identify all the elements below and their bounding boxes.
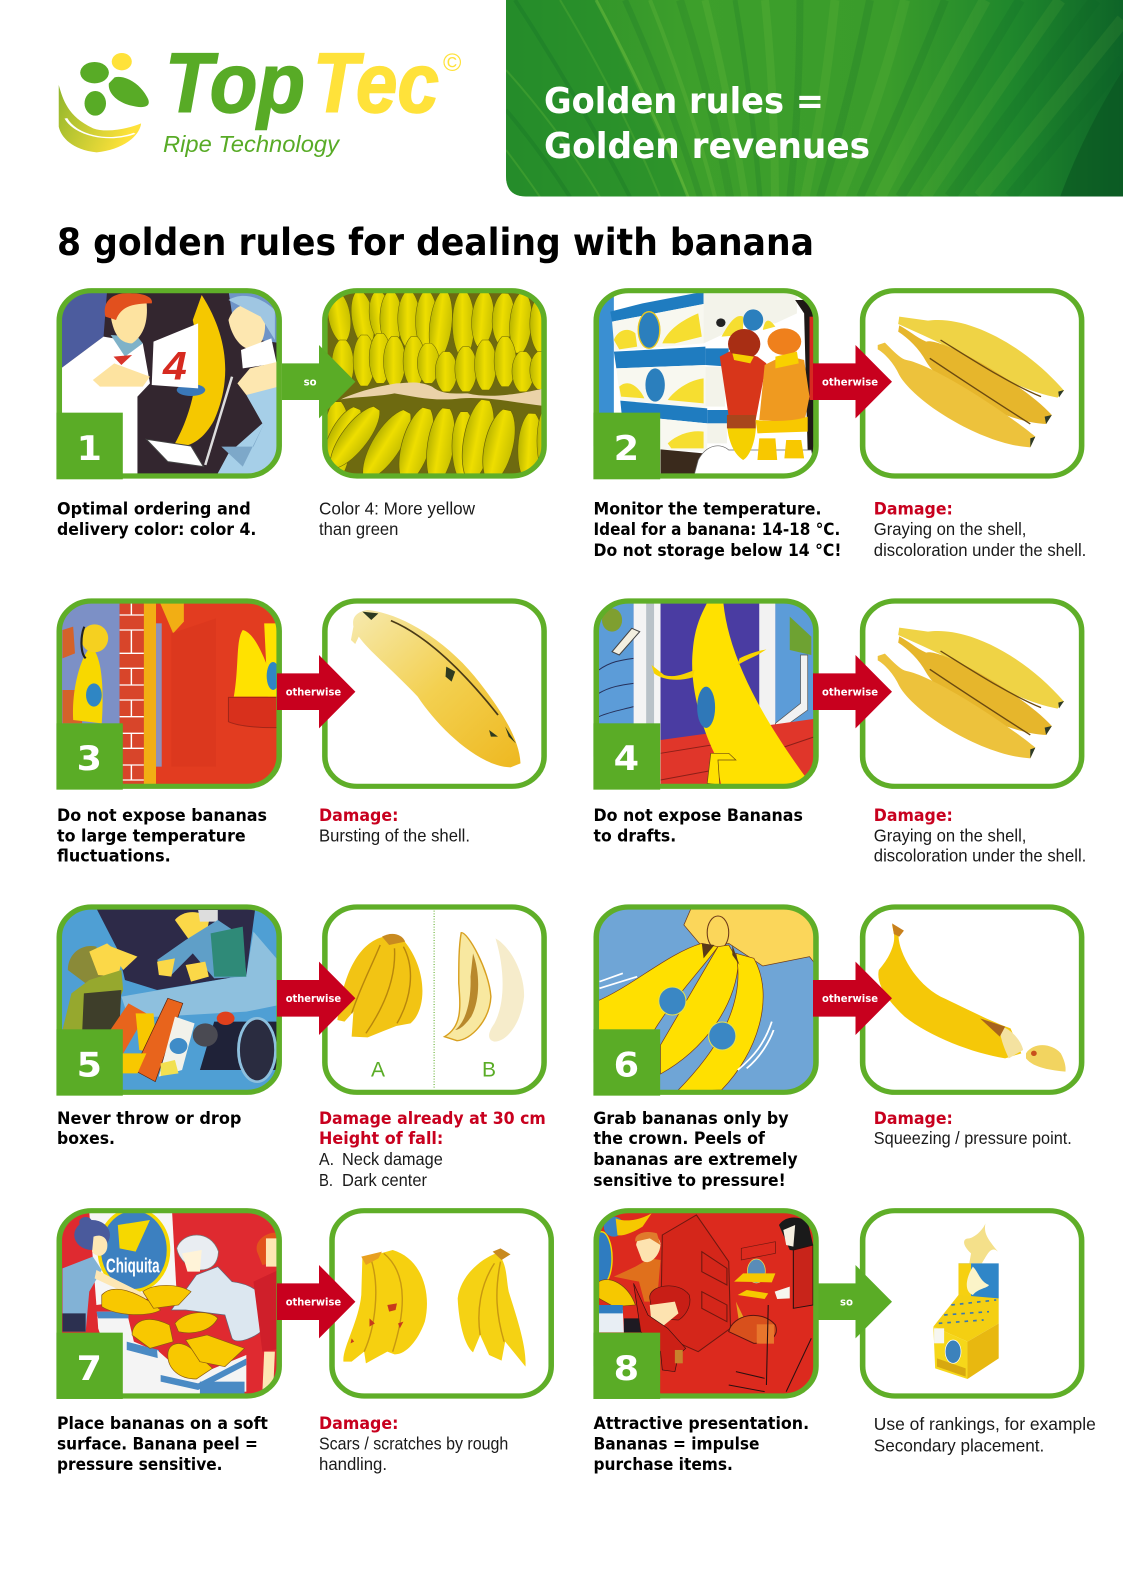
number badge 8 (593, 1333, 660, 1399)
damage text (319, 1109, 546, 1190)
result text: Use of rankings, for example (874, 1414, 1096, 1434)
damage text: Damage: (874, 499, 953, 519)
panel border (863, 601, 1082, 786)
number badge 7 (56, 1333, 123, 1399)
panel: rule 2 (592, 287, 1086, 561)
panel border (596, 291, 816, 476)
damage text: Bursting of the shell. (319, 826, 470, 846)
panel: rule 7 (54, 1205, 551, 1475)
illustration pair rule 1 (54, 287, 559, 484)
result text: than green (319, 519, 398, 539)
panel: rule 1 (54, 287, 559, 540)
damage text: Graying on the shell, (874, 826, 1026, 846)
rule text (594, 499, 842, 561)
number badge 3 (56, 723, 123, 790)
illustration pair rule 8 (591, 1205, 1082, 1402)
header banner: leaf with slogan (506, 0, 1123, 197)
rule text: to drafts. (594, 826, 676, 846)
leaf background (506, 0, 1123, 197)
cartoon: doctor and banana with colour card (62, 293, 276, 474)
photo: secondary placement display stand (933, 1223, 999, 1379)
rule text: to large temperature (57, 826, 246, 846)
rule text (594, 806, 803, 846)
label B: B (482, 1058, 496, 1082)
rule text: Ideal for a banana: 14-18 °C. (594, 520, 840, 540)
cartoon: attractive shop display (599, 1213, 814, 1394)
arrow: otherwise (813, 962, 892, 1035)
rule text: Monitor the temperature. (594, 499, 822, 519)
panel: rule 3 (54, 597, 544, 867)
panel border (596, 1211, 816, 1396)
rule text: purchase items. (594, 1455, 733, 1475)
illustration pair rule 2 (592, 287, 1082, 480)
illustration pair rule 3 (54, 597, 544, 790)
arrow label: otherwise (822, 686, 878, 698)
panel border (863, 291, 1082, 476)
rule text: Attractive presentation. (594, 1414, 809, 1434)
photo: color 4 bananas (328, 293, 542, 474)
number badge 1 (56, 413, 123, 479)
slogan line 2: Golden revenues (544, 126, 870, 167)
arrow label: otherwise (822, 376, 878, 388)
logo: TopTec Ripe Technology (59, 36, 462, 157)
logo word: Tec: Tec (313, 36, 439, 130)
arrow label: otherwise (286, 1296, 341, 1308)
cartoon: doctor and banana with colour card: 4 (162, 343, 187, 388)
rule text (57, 1414, 268, 1475)
rule text: pressure sensitive. (57, 1455, 222, 1475)
panel: rule 4 (592, 597, 1086, 866)
damage text (874, 499, 1086, 560)
panel border (59, 1211, 279, 1396)
result text (319, 498, 475, 539)
photo B: cut banana with dark center (444, 933, 524, 1042)
damage text (874, 806, 1086, 866)
panel border (325, 601, 544, 786)
rule text: boxes. (57, 1129, 115, 1149)
rule text: bananas are extremely (593, 1150, 798, 1170)
slogan line 1: Golden rules = (544, 81, 824, 122)
panel border (325, 907, 544, 1092)
panel border (59, 601, 279, 786)
panel border (596, 601, 816, 786)
rule text (593, 1109, 798, 1191)
damage text: discoloration under the shell. (874, 846, 1086, 866)
damage text (874, 1109, 1072, 1148)
panel border (59, 907, 279, 1092)
arrow label: otherwise (286, 686, 341, 698)
logo word: Top: Top (165, 36, 305, 130)
photo: grayed bananas (878, 628, 1064, 758)
damage text: Height of fall: (319, 1129, 443, 1149)
title: 8 golden rules for dealing with banana (57, 221, 814, 264)
cartoon: banana in a draft (599, 604, 814, 784)
cartoon: boxes dropped from truck (62, 910, 276, 1090)
photo: scarred bananas (343, 1248, 526, 1367)
rule text: the crown. Peels of (594, 1129, 765, 1149)
rule text: Do not expose bananas (57, 806, 267, 826)
damage text: Graying on the shell, (874, 519, 1026, 539)
number 3: 3 (77, 739, 102, 779)
damage text: Damage: (319, 806, 398, 826)
panel border (59, 291, 279, 476)
result text: Secondary placement. (874, 1436, 1044, 1456)
arrow: otherwise (277, 962, 355, 1035)
rule text: sensitive to pressure! (593, 1171, 786, 1191)
rule text: surface. Banana peel = (57, 1434, 258, 1454)
arrow: so (282, 345, 355, 418)
copyright mark: © (443, 49, 462, 77)
rule text (57, 1109, 241, 1149)
damage text: Neck damage (342, 1149, 443, 1169)
arrow label: so (840, 1296, 853, 1308)
number badge 4 (593, 723, 660, 790)
damage text: Scars / scratches by rough (319, 1434, 508, 1454)
illustration pair rule 4 (592, 597, 1082, 790)
panel border (863, 1211, 1082, 1396)
damage text: discoloration under the shell. (874, 540, 1086, 560)
label A: A (371, 1058, 385, 1082)
rule text: Bananas = impulse (594, 1434, 760, 1454)
cartoon: banana moving from cold to warm (62, 604, 276, 784)
arrow: otherwise (813, 345, 892, 418)
damage text (319, 1414, 508, 1474)
rule text: Do not storage below 14 °C! (594, 541, 842, 561)
number 1: 1 (77, 429, 102, 469)
panel: rule 8 (591, 1205, 1096, 1475)
rule text (57, 806, 267, 867)
divider: dotted line (433, 911, 436, 1089)
panel: rule 5 (54, 903, 546, 1190)
number badge 5 (56, 1029, 123, 1096)
panel border (325, 291, 544, 476)
arrow label: otherwise (822, 993, 878, 1005)
illustration pair rule 6 (592, 903, 1082, 1097)
arrow label: so (304, 376, 317, 388)
damage text: Damage: (874, 806, 953, 826)
arrow: otherwise (277, 1265, 355, 1338)
rule text (594, 1414, 809, 1475)
panel: rule 6 (592, 903, 1082, 1191)
number badge 2 (593, 413, 660, 479)
rule text: Place bananas on a soft (57, 1414, 268, 1434)
photo: burst banana (351, 610, 521, 767)
arrow: so (818, 1265, 892, 1338)
result text (874, 1414, 1096, 1456)
rule text: delivery color: color 4. (57, 520, 256, 540)
damage text: Damage: (319, 1414, 398, 1434)
damage text: Dark center (342, 1170, 427, 1190)
icon: banana and fruits (59, 53, 149, 152)
rule text: Grab bananas only by (593, 1109, 789, 1129)
damage text: Damage: (874, 1109, 953, 1129)
damage text: Squeezing / pressure point. (874, 1128, 1072, 1148)
photo: squeezed banana (878, 923, 1066, 1072)
damage text: B. (319, 1170, 333, 1190)
number 8: 8 (614, 1349, 639, 1389)
cartoon: shoppers at banana display (62, 1213, 276, 1394)
rule text: Optimal ordering and (57, 499, 251, 519)
number 6: 6 (614, 1046, 639, 1085)
damage text: Damage already at 30 cm (319, 1109, 546, 1129)
panel border (332, 1211, 551, 1396)
number 2: 2 (614, 429, 639, 469)
cartoon: shoppers at banana display: Chiquita (106, 1254, 160, 1277)
photo A: banana hand with neck damage (337, 934, 422, 1037)
arrow: otherwise (277, 655, 355, 728)
number badge 6 (593, 1029, 660, 1096)
rule text: Never throw or drop (57, 1109, 241, 1129)
damage text (319, 806, 470, 846)
damage text: A. (319, 1149, 334, 1169)
arrow: otherwise (813, 655, 892, 728)
rule text: fluctuations. (57, 847, 171, 867)
cartoon: hand holding bananas by the crown (599, 910, 814, 1090)
illustration pair rule 7 (54, 1205, 551, 1402)
tagline: Ripe Technology (163, 131, 341, 157)
illustration pair rule 5 (54, 903, 544, 1097)
photo: grayed bananas (878, 317, 1064, 447)
result text: Color 4: More yellow (319, 498, 475, 518)
cartoon: bananas freezing beside boxes (599, 293, 814, 474)
number 5: 5 (77, 1046, 102, 1085)
arrow label: otherwise (286, 993, 341, 1005)
rule text: Do not expose Bananas (594, 806, 803, 826)
damage text: handling. (319, 1454, 387, 1474)
panel border (863, 907, 1082, 1092)
panel border (596, 907, 816, 1092)
rule text (57, 499, 256, 540)
number 4: 4 (614, 739, 639, 779)
number 7: 7 (77, 1349, 102, 1389)
